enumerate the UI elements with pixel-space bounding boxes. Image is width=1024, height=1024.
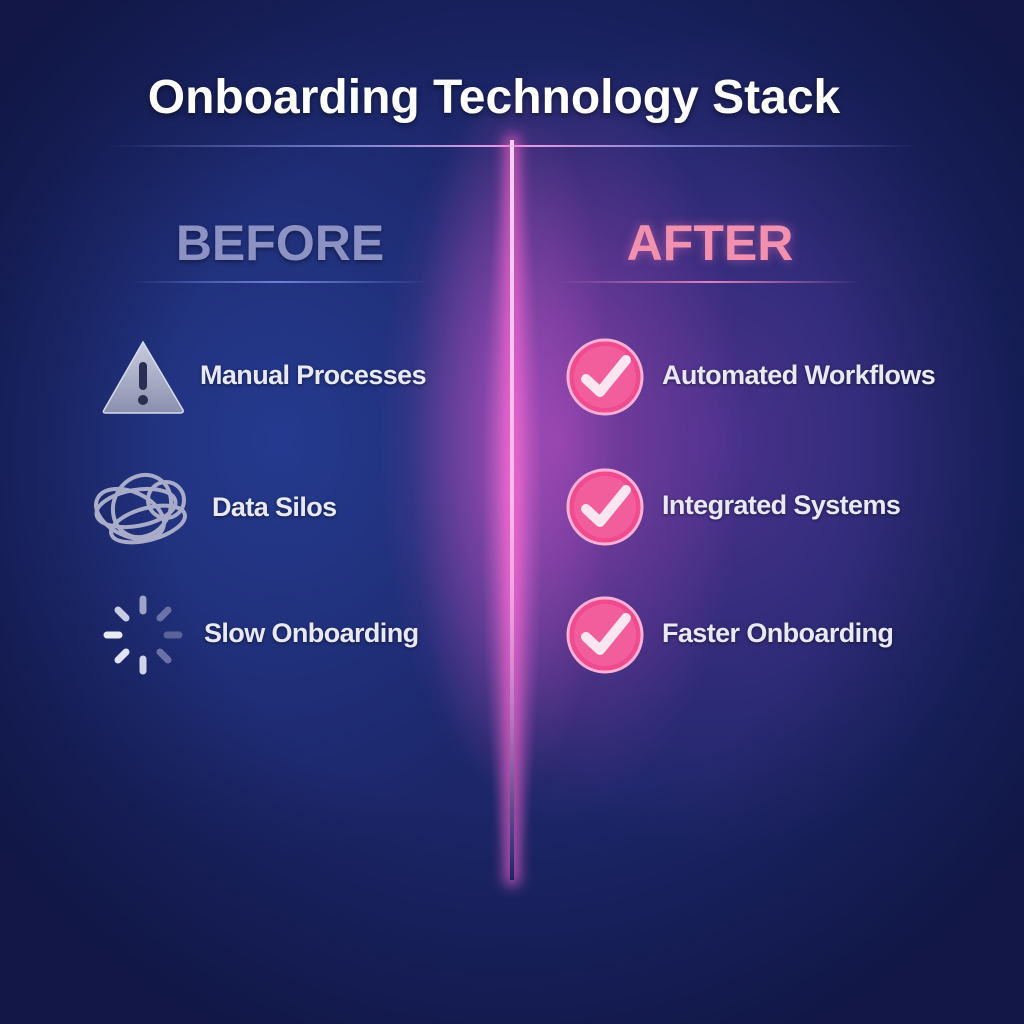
- item: manual processes: [102, 340, 427, 414]
- item: data silos: [94, 472, 338, 544]
- icon: warning: [102, 340, 184, 414]
- icon: check: [566, 596, 644, 674]
- item: automated workflows: [566, 338, 936, 416]
- heading: before: BEFORE: [176, 215, 384, 271]
- icon: spinner: [104, 596, 182, 674]
- icon: check: [566, 338, 644, 416]
- item: slow onboarding: [104, 596, 419, 674]
- heading: after: AFTER: [627, 215, 793, 271]
- title: Onboarding Technology Stack: [148, 71, 840, 124]
- icon: check: [566, 468, 644, 546]
- item: integrated systems: [566, 468, 901, 546]
- item: slow onboarding: Slow Onboarding: [204, 618, 418, 648]
- item: data silos: Data Silos: [212, 492, 337, 522]
- item: manual processes: Manual Processes: [200, 360, 426, 390]
- item: integrated systems: Integrated Systems: [662, 490, 900, 520]
- glowing divider line: [482, 140, 542, 890]
- item: faster onboarding: [566, 596, 894, 674]
- item: automated workflows: Automated Workflows: [662, 360, 935, 390]
- icon: tangle: [94, 472, 187, 544]
- item: faster onboarding: Faster Onboarding: [662, 618, 893, 648]
